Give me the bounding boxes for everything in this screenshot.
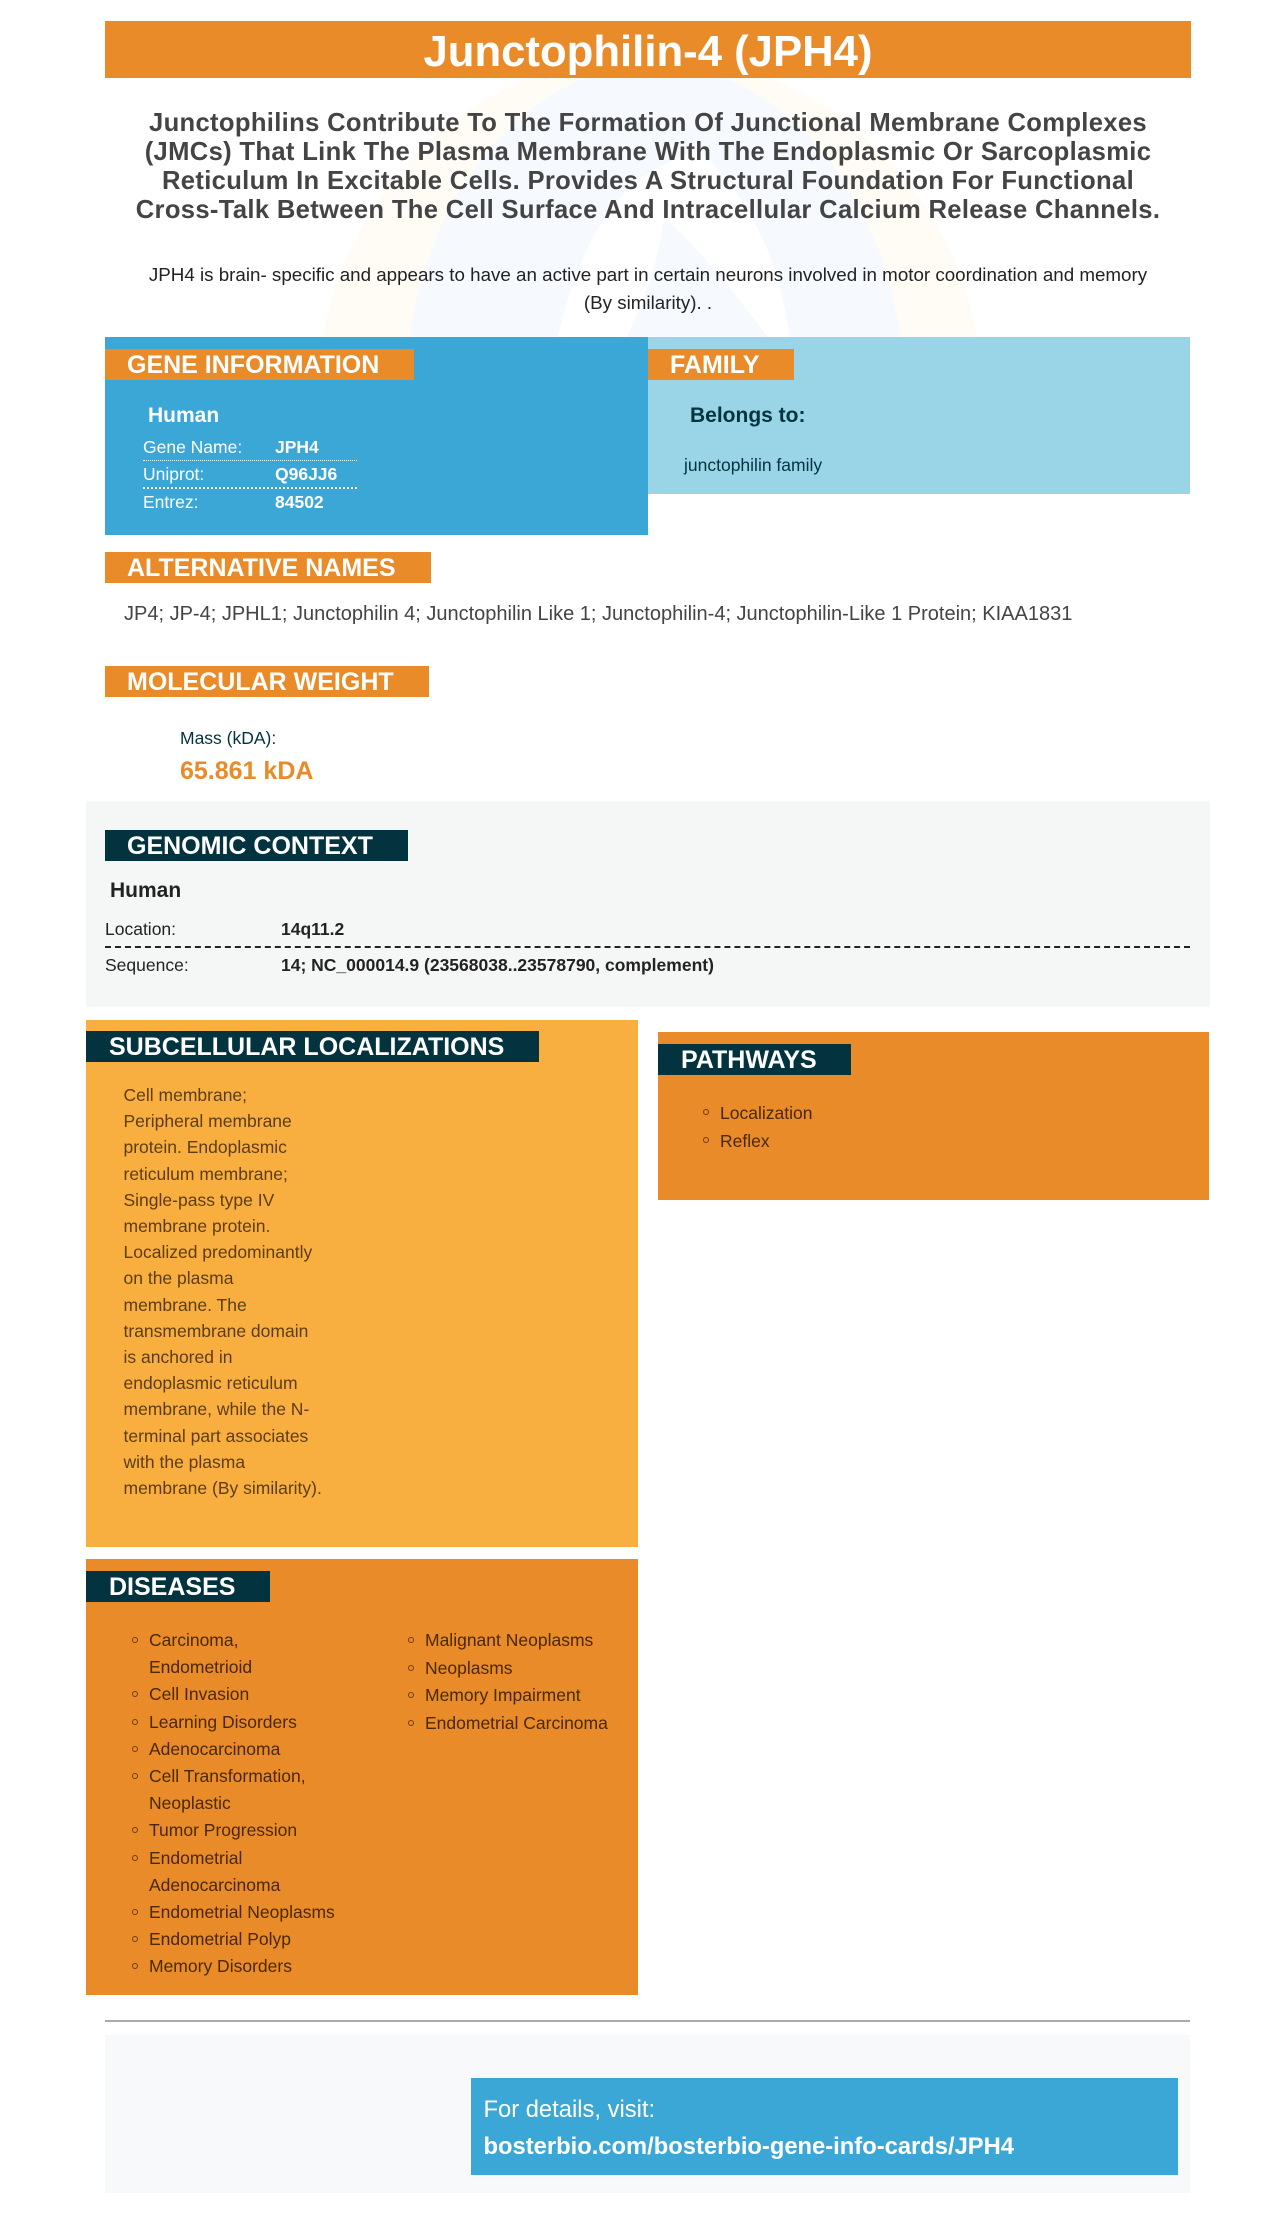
diseases list column 1: Cell Transformation, <box>149 1766 306 1786</box>
entrez row: Entrez: <box>143 492 198 512</box>
belongs to label: Belongs to: <box>690 404 806 427</box>
heading: gene information: GENE INFORMATION <box>127 351 379 379</box>
family value: junctophilin family <box>684 455 822 475</box>
diseases list column 1: Carcinoma, <box>149 1630 238 1650</box>
mass label: Mass (kDA): <box>180 728 276 748</box>
localization text: on the plasma <box>124 1268 233 1288</box>
heading: pathways <box>658 1044 851 1075</box>
panel: footer <box>105 2035 1190 2193</box>
uniprot row: Uniprot: <box>143 464 204 484</box>
summary heading: Cross-Talk Between The Cell Surface And Intracellular Calcium Release Channels. <box>136 196 1160 224</box>
background watermark <box>323 78 977 337</box>
panel: gene information <box>105 337 648 535</box>
heading: diseases: DISEASES <box>109 1573 235 1601</box>
diseases list column 2: Neoplasms <box>425 1658 513 1678</box>
details url: bosterbio.com/bosterbio-gene-info-cards/JPH4 <box>484 2133 1014 2160</box>
species label: Human <box>148 404 219 427</box>
sequence row: Sequence: <box>105 955 189 975</box>
localization text: with the plasma <box>124 1452 245 1472</box>
localization text: Single-pass type IV <box>124 1190 274 1210</box>
details label: For details, visit: <box>484 2096 655 2123</box>
description text: JPH4 is brain- specific and appears to have an active part in certain neurons involved in motor coordination and memory <box>149 264 1147 285</box>
heading: family <box>648 349 794 380</box>
localization text: membrane (By similarity). <box>124 1478 322 1498</box>
diseases list column 2 <box>408 1630 608 1732</box>
diseases list column 1: Tumor Progression <box>149 1820 297 1840</box>
localization text: transmembrane domain <box>124 1321 308 1341</box>
location row: 14q11.2 <box>281 919 344 939</box>
alternative names text: JP4; JP-4; JPHL1; Junctophilin 4; Junctophilin Like 1; Junctophilin-4; Junctophilin-Like 1 Protein; KIAA1831 <box>124 603 1072 625</box>
panel: family <box>648 337 1190 494</box>
diseases list column 1: Memory Disorders <box>149 1956 292 1976</box>
pathways list: Reflex <box>720 1131 770 1151</box>
panel: subcellular localizations <box>86 1020 638 1547</box>
pathways list: Localization <box>720 1103 812 1123</box>
panel: pathways <box>658 1032 1209 1200</box>
heading: pathways: PATHWAYS <box>681 1046 817 1074</box>
pathways list <box>703 1103 812 1151</box>
diseases list column 2: Memory Impairment <box>425 1685 581 1705</box>
location row <box>105 917 1190 948</box>
callout: details link <box>471 2078 1178 2175</box>
mass value: 65.861 kDA <box>180 757 313 785</box>
diseases list column 1: Cell Invasion <box>149 1684 249 1704</box>
localization text: reticulum membrane; <box>124 1164 288 1184</box>
localization text: is anchored in <box>124 1347 232 1367</box>
description text <box>149 264 1148 313</box>
footer rule <box>105 2020 1190 2022</box>
summary heading: Reticulum In Excitable Cells. Provides A Structural Foundation For Functional <box>162 167 1134 195</box>
uniprot row <box>143 462 357 489</box>
title banner: Junctophilin-4 (JPH4) <box>423 27 873 76</box>
localization text: membrane, while the N- <box>124 1399 309 1419</box>
diseases list column 1: Endometrial Polyp <box>149 1929 291 1949</box>
entrez row <box>143 492 324 512</box>
panel: genomic context <box>86 801 1210 1007</box>
localization text: membrane protein. <box>124 1216 270 1236</box>
uniprot row: Q96JJ6 <box>275 464 337 484</box>
entrez row: 84502 <box>275 492 324 512</box>
summary heading: (JMCs) That Link The Plasma Membrane With The Endoplasmic Or Sarcoplasmic <box>145 138 1151 166</box>
species label: Human <box>110 879 181 902</box>
summary heading <box>136 109 1160 224</box>
gene name row: Gene Name: <box>143 437 242 457</box>
localization text: Peripheral membrane <box>124 1111 292 1131</box>
localization text: Cell membrane; <box>124 1085 247 1105</box>
localization text: protein. Endoplasmic <box>124 1137 287 1157</box>
diseases list column 1: Learning Disorders <box>149 1712 297 1732</box>
diseases list column 1 <box>132 1630 335 1976</box>
sequence row: 14; NC_000014.9 (23568038..23578790, complement) <box>281 955 714 975</box>
localization text <box>124 1085 322 1498</box>
diseases list column 1: Adenocarcinoma <box>149 1739 280 1759</box>
heading: molecular weight: MOLECULAR WEIGHT <box>127 668 394 696</box>
heading: family: FAMILY <box>670 351 759 379</box>
gene name row: JPH4 <box>275 437 319 457</box>
diseases list column 1: Adenocarcinoma <box>149 1875 280 1895</box>
localization text: membrane. The <box>124 1295 247 1315</box>
diseases list column 1: Neoplastic <box>149 1793 231 1813</box>
localization text: terminal part associates <box>124 1426 308 1446</box>
diseases list column 1: Endometrial <box>149 1848 242 1868</box>
heading: diseases <box>86 1571 270 1602</box>
diseases list column 1: Endometrial Neoplasms <box>149 1902 335 1922</box>
gene name row <box>143 435 357 461</box>
title banner <box>105 21 1191 78</box>
heading: subcellular localizations: SUBCELLULAR LOCALIZATIONS <box>109 1033 504 1061</box>
diseases list column 2: Endometrial Carcinoma <box>425 1712 608 1732</box>
diseases list column 2: Malignant Neoplasms <box>425 1630 593 1650</box>
heading: genomic context: GENOMIC CONTEXT <box>127 832 373 860</box>
localization text: Localized predominantly <box>124 1242 312 1262</box>
heading: alternative names: ALTERNATIVE NAMES <box>127 554 396 582</box>
description text: (By similarity). . <box>584 292 712 313</box>
localization text: endoplasmic reticulum <box>124 1373 298 1393</box>
summary heading: Junctophilins Contribute To The Formation Of Junctional Membrane Complexes <box>149 109 1147 137</box>
panel: diseases <box>86 1559 638 1995</box>
diseases list column 1: Endometrioid <box>149 1657 252 1677</box>
location row: Location: <box>105 919 176 939</box>
